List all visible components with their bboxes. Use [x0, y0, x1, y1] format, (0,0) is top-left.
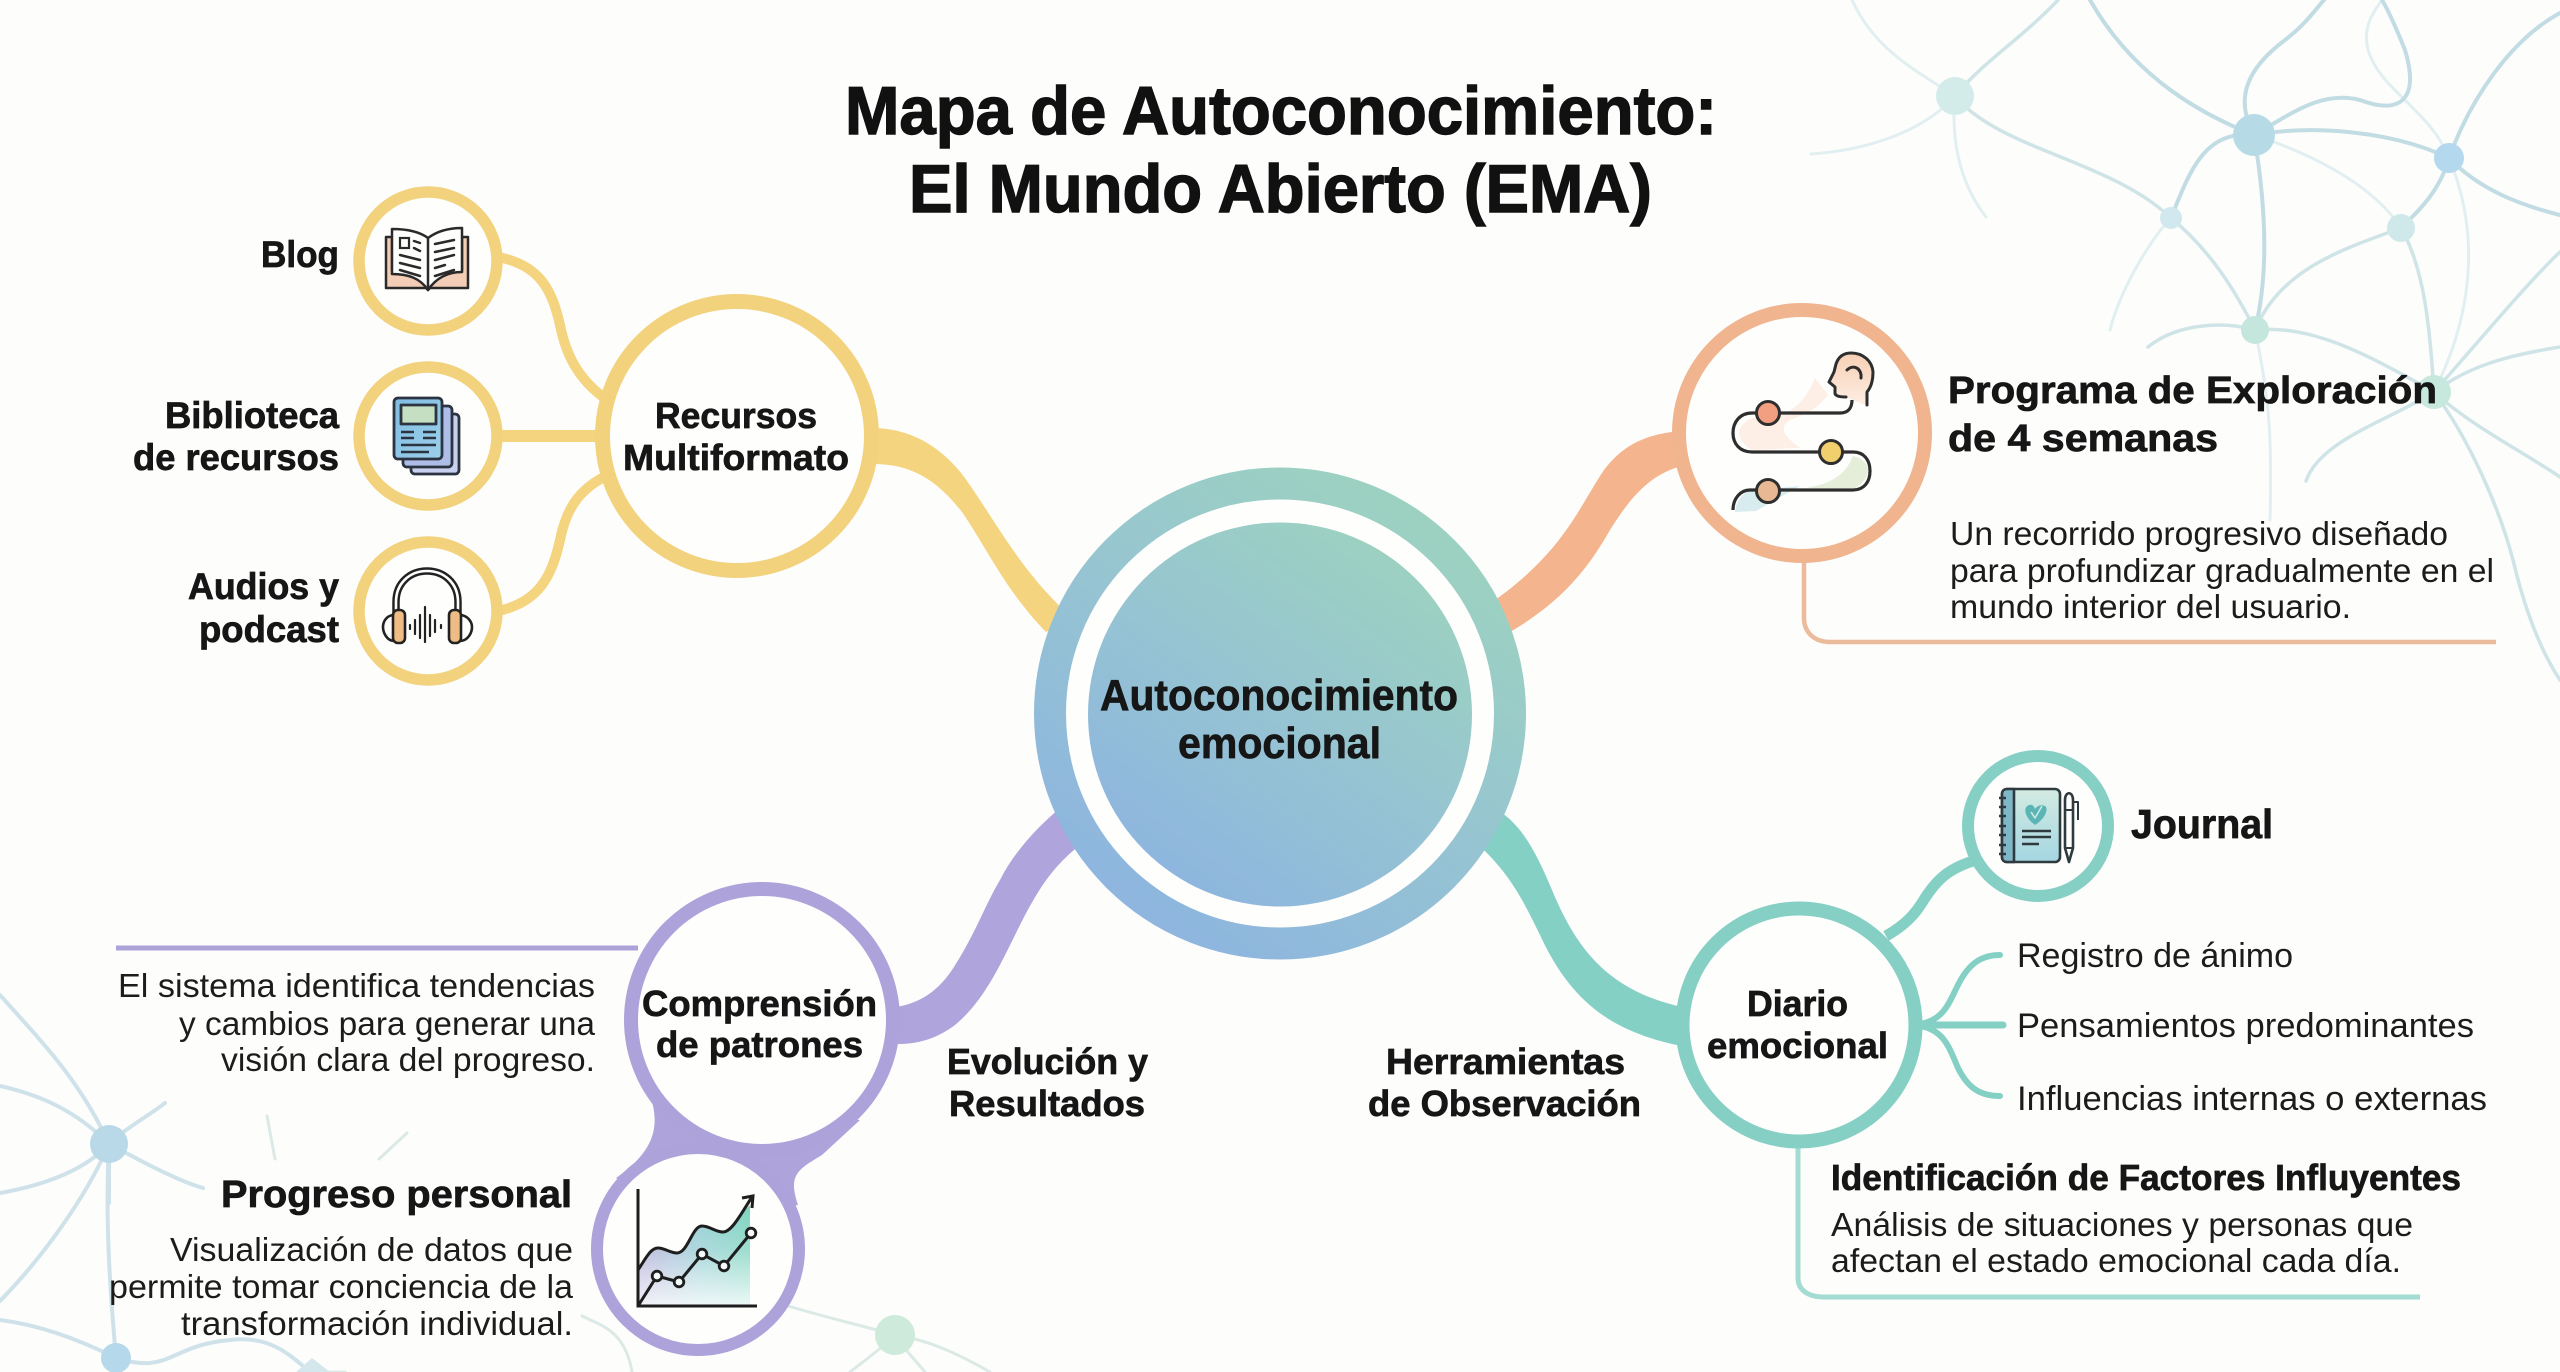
icon: headphones	[383, 571, 472, 643]
title: El Mundo Abierto (EMA)	[909, 151, 1652, 227]
neuron nodes: bottom left	[90, 1125, 915, 1372]
node: Biblioteca de recursos	[133, 367, 497, 505]
label: Evolución y Resultados	[947, 1041, 1148, 1124]
label: Evolución y Resultados: Evolución y	[947, 1041, 1148, 1082]
node: Recursos Multiformato: Multiformato	[623, 437, 849, 478]
node: Progreso personal icon circle	[597, 1148, 799, 1350]
label: Herramientas de Observación	[1368, 1041, 1641, 1124]
heading: Programa de Exploración	[1948, 370, 2437, 460]
callout rule: Factores	[1798, 1146, 2420, 1297]
text block: Factores description	[1831, 1206, 2413, 1279]
list: emotional diary items: Pensamientos predominantes	[2017, 1007, 2474, 1045]
node: Journal: Journal	[2131, 801, 2273, 847]
connector: Biblioteca to Recursos	[498, 430, 600, 442]
node: Programa icon circle	[1679, 310, 1925, 556]
node: Audios y podcast	[188, 542, 497, 680]
branch: Recursos Multiformato (yellow)	[133, 192, 1072, 680]
title	[845, 73, 1717, 227]
central node: Autoconocimiento emocional: Autoconocimiento	[1100, 671, 1458, 720]
branch: Comprensión de patrones (purple)	[109, 808, 1148, 1350]
text block: Comprensión description: y cambios para generar una	[179, 1005, 596, 1042]
node: Comprensión de patrones	[631, 889, 893, 1151]
connector: center to Recursos	[872, 428, 1072, 632]
connector: center to Diario	[1470, 806, 1682, 1046]
list: emotional diary items	[2017, 937, 2487, 1118]
text block: Programa description	[1950, 515, 2494, 625]
heading: Programa de Exploración: Programa de Exploración	[1948, 370, 2437, 412]
node: Comprensión de patrones: de patrones	[656, 1024, 863, 1065]
text block: Comprensión description: visión clara del progreso.	[221, 1041, 595, 1078]
connector: center to Comprensión	[890, 808, 1080, 1044]
node: Audios y podcast: Audios y	[188, 566, 339, 607]
text block: Progreso description: permite tomar conciencia de la	[109, 1268, 574, 1305]
icon: head and winding path	[1733, 353, 1873, 512]
connector: center to Programa	[1495, 431, 1682, 632]
text block: Factores description: afectan el estado emocional cada día.	[1831, 1242, 2401, 1279]
text block: Progreso description: Visualización de datos que	[170, 1231, 573, 1268]
icon: notebook and pen	[1999, 789, 2078, 862]
text block: Progreso description: transformación individual.	[181, 1305, 573, 1342]
central node: Autoconocimiento emocional	[1050, 484, 1510, 944]
connector: Diario to Registro	[1920, 955, 2000, 1024]
label: Evolución y Resultados: Resultados	[949, 1083, 1145, 1124]
text block: Programa description: para profundizar gradualmente en el	[1950, 552, 2494, 589]
node: Biblioteca de recursos: de recursos	[133, 437, 339, 478]
heading: Progreso personal: Progreso personal	[221, 1174, 572, 1216]
list: emotional diary items: Influencias internas o externas	[2017, 1080, 2487, 1118]
neural network decoration: top right	[1811, 0, 2560, 680]
node: Blog	[261, 192, 497, 330]
label: Herramientas de Observación: Herramientas	[1386, 1041, 1625, 1082]
central node: Autoconocimiento emocional: emocional	[1178, 719, 1381, 768]
connector: neck between Comprensión and Progreso	[616, 1095, 860, 1220]
node: Journal	[1968, 756, 2273, 896]
connector: Diario to Journal	[1886, 860, 1976, 936]
list: emotional diary items: Registro de ánimo	[2017, 937, 2293, 975]
node: Diario emocional	[1682, 908, 1916, 1142]
text block: Programa description: Un recorrido progresivo diseñado	[1950, 515, 2448, 552]
text block: Progreso description	[109, 1231, 574, 1342]
text block: Comprensión description	[118, 967, 596, 1078]
node: Audios y podcast: podcast	[199, 609, 339, 650]
node: Recursos Multiformato	[602, 302, 872, 570]
icon: open book	[386, 228, 468, 290]
title: Mapa de Autoconocimiento:	[845, 73, 1717, 149]
connector: Diario to Influencias	[1920, 1026, 2000, 1096]
heading: Programa de Exploración: de 4 semanas	[1948, 418, 2218, 460]
branch: Diario emocional (teal)	[1368, 756, 2487, 1297]
callout rule: Programa	[1804, 560, 2496, 642]
label: Herramientas de Observación: de Observación	[1368, 1083, 1641, 1124]
text block: Comprensión description: El sistema identifica tendencias	[118, 967, 595, 1004]
connector: Blog to Recursos	[498, 257, 603, 397]
callout rule: Comprensión	[116, 946, 638, 950]
neuron nodes: top right	[1936, 77, 2464, 409]
node: Diario emocional: emocional	[1707, 1025, 1888, 1066]
node: Recursos Multiformato: Recursos	[655, 395, 817, 436]
heading: Identificación de Factores Influyentes: Identificación de Factores Influyentes	[1831, 1157, 2461, 1198]
node: Blog: Blog	[261, 234, 339, 275]
neural network decoration: bottom left	[0, 995, 990, 1372]
node: Comprensión de patrones: Comprensión	[642, 983, 877, 1024]
text block: Programa description: mundo interior del usuario.	[1950, 588, 2351, 625]
connector: Audios to Recursos	[498, 476, 606, 611]
node: Diario emocional: Diario	[1747, 983, 1848, 1024]
text block: Factores description: Análisis de situaciones y personas que	[1831, 1206, 2413, 1243]
branch: Programa de Exploración (orange)	[1495, 310, 2496, 642]
node: Biblioteca de recursos: Biblioteca	[165, 395, 339, 436]
connector: Diario to Pensamientos	[1918, 1022, 2003, 1028]
icon: document stack	[394, 398, 459, 474]
icon: line chart	[638, 1189, 757, 1306]
